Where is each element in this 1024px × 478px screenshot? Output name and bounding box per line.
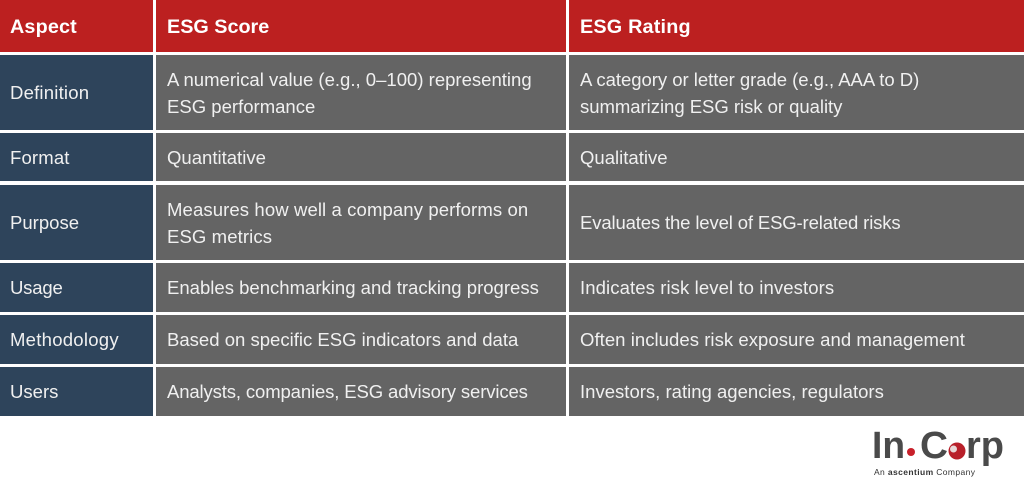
row label: Users [0,367,153,416]
cell: Users rating [569,367,1024,416]
header: Aspect [0,0,153,52]
row label: Definition: Definition [10,82,89,103]
header: Aspect: Aspect [10,16,77,38]
row label: Usage: Usage [10,277,63,298]
logo wordmark: In [872,425,905,467]
logo wordmark [872,425,1004,467]
cell: Definition rating: A category or letter grade (e.g., AAA to D) [580,68,919,90]
cell: Users rating: Investors, rating agencies, regulators [580,381,884,402]
cell: Methodology rating [569,315,1024,364]
row label: Format [0,133,153,181]
cell: Usage rating: Indicates risk level to investors [580,277,834,298]
cell: Definition rating: summarizing ESG risk or quality [580,96,842,116]
header: ESG Rating [569,0,1024,52]
cell: Methodology score [156,315,566,364]
cell: Purpose rating [569,185,1024,260]
row label: Usage [0,263,153,312]
cell: Format score: Quantitative [167,146,266,168]
cell: Users score: Analysts, companies, ESG advisory services [167,381,528,402]
cell: Definition score: ESG performance [167,96,315,116]
cell: Methodology score: Based on specific ESG indicators and data [167,329,518,350]
logo wordmark: rp [966,425,1004,467]
row label: Format: Format [10,146,70,168]
logo: InCorp, an Ascentium company [872,425,1004,477]
cell: Definition rating [569,55,1024,130]
cell: Purpose score: ESG metrics [167,226,272,246]
cell: Purpose score: Measures how well a company performs on [167,198,528,220]
row label: Definition [0,55,153,130]
row label: Purpose: Purpose [10,212,79,233]
row label: Purpose [0,185,153,260]
header: ESG Score: ESG Score [167,16,269,38]
cell: Usage score [156,263,566,312]
cell: Format rating [569,133,1024,181]
row label: Methodology: Methodology [10,329,119,350]
logo tagline: An ascentium Company [874,467,976,477]
header: ESG Score [156,0,566,52]
row label: Users: Users [10,381,58,402]
cell: Definition score [156,55,566,130]
cell: Methodology rating: Often includes risk exposure and management [580,329,965,350]
cell: Definition score: A numerical value (e.g., 0–100) representing [167,68,532,90]
cell: Usage score: Enables benchmarking and tracking progress [167,277,539,298]
cell: Usage rating [569,263,1024,312]
row label: Methodology [0,315,153,364]
cell: Format score [156,133,566,181]
cell: Purpose rating: Evaluates the level of ESG-related risks [580,212,901,233]
header: ESG Rating: ESG Rating [580,16,691,38]
logo wordmark: C [920,425,948,467]
cell: Format rating: Qualitative [580,146,668,168]
cell: Purpose score [156,185,566,260]
cell: Users score [156,367,566,416]
